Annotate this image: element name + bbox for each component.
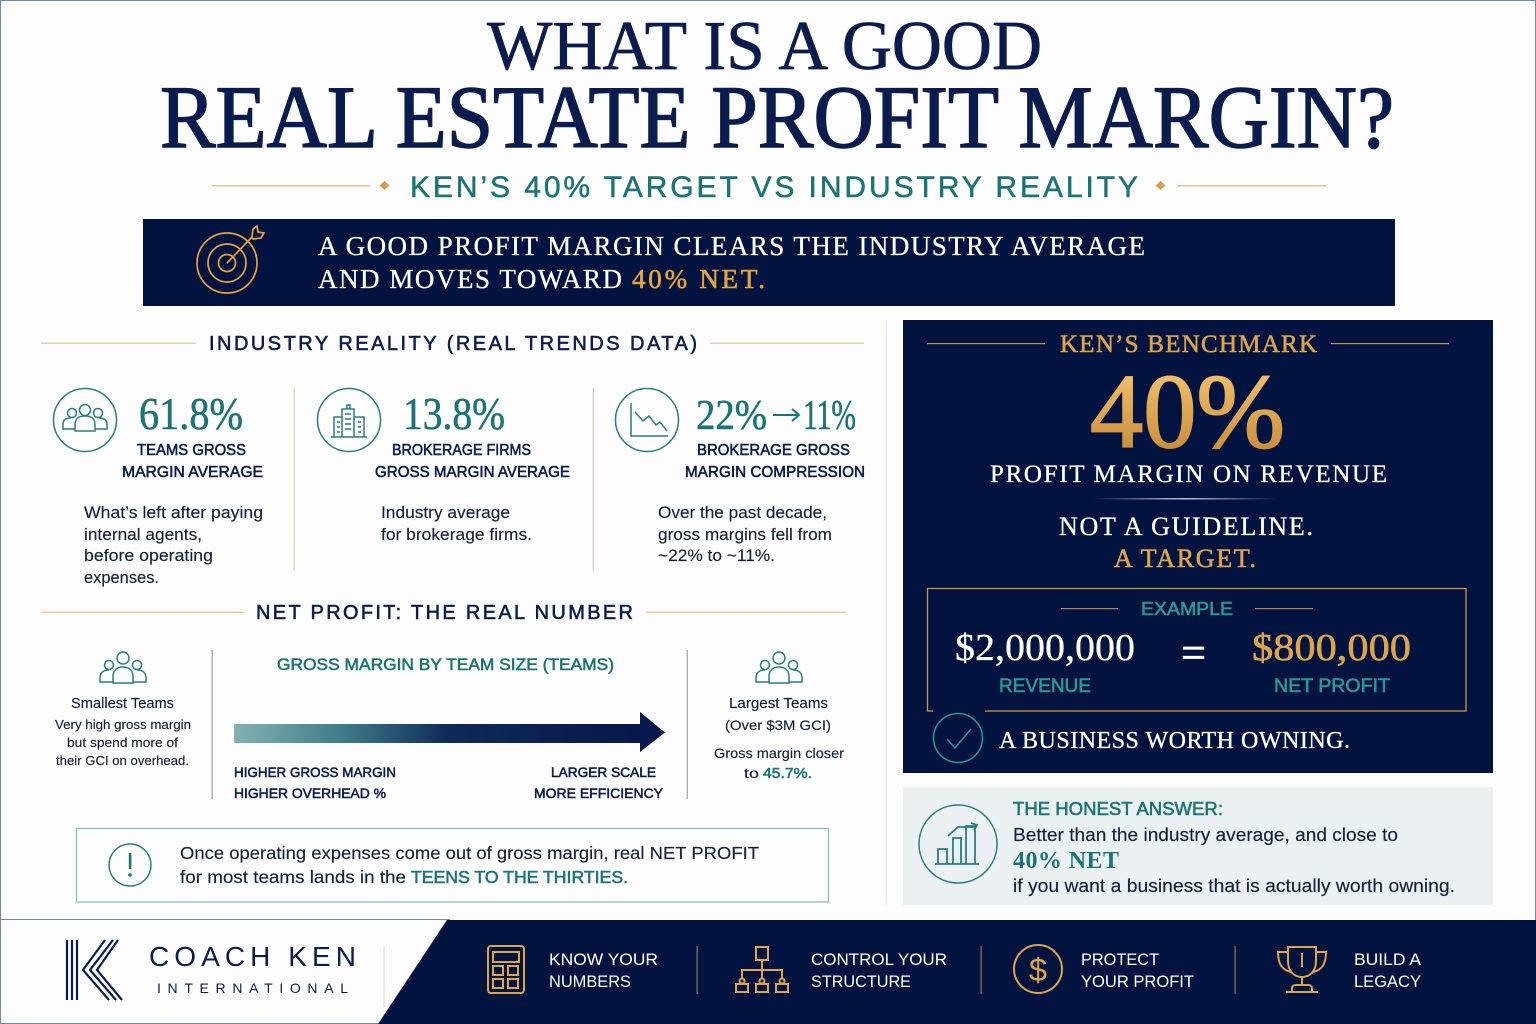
icon: check mark <box>934 714 982 762</box>
item: know your numbers: KNOW YOUR <box>549 950 658 969</box>
largest teams column: Gross margin closer <box>714 745 844 761</box>
panel: the honest answer: Better than the industry average, and close to <box>1013 825 1398 845</box>
panel: Ken's benchmark <box>903 320 1493 773</box>
arrow: scale gradient <box>234 712 665 752</box>
chart: gross margin by team size: LARGER SCALE <box>551 764 656 780</box>
stat: brokerage gross margin compression: 11% <box>803 393 856 439</box>
icon: smallest team <box>100 652 146 683</box>
chart: gross margin by team size: HIGHER GROSS MARGIN <box>234 764 396 780</box>
stat: teams gross margin: TEAMS GROSS <box>137 442 246 459</box>
stat: teams gross margin: 61.8% <box>139 389 243 439</box>
icon: growth bars <box>919 805 997 883</box>
icon: largest team <box>756 652 802 683</box>
smallest teams column: but spend more of <box>67 735 178 750</box>
item: protect your profit: PROTECT <box>1081 950 1159 969</box>
stat: brokerage gross margin compression: gross margins fell from <box>658 525 832 544</box>
icon: office buildings <box>318 388 380 452</box>
largest teams column: Largest Teams <box>729 696 828 712</box>
icon: dollar coin: $ <box>1029 952 1047 988</box>
stat: teams gross margin: What’s left after paying <box>84 503 263 522</box>
largest teams column: to <box>744 765 759 781</box>
example box: $2,000,000 <box>955 627 1135 669</box>
icon: trophy <box>1278 947 1326 992</box>
stat: teams gross margin: internal agents, <box>84 525 202 544</box>
chart: gross margin by team size: MORE EFFICIENCY <box>534 785 664 801</box>
panel: Ken's benchmark: A BUSINESS WORTH OWNING. <box>999 728 1350 754</box>
stat: brokerage gross margin compression: MARGIN COMPRESSION <box>685 464 865 481</box>
heading: net profit: NET PROFIT: THE REAL NUMBER <box>256 602 633 624</box>
chart: gross margin by team size: HIGHER OVERHEAD % <box>234 785 386 801</box>
stat: brokerage firms gross margin: for brokerage firms. <box>381 525 532 544</box>
stat: brokerage gross margin compression: BROKERAGE GROSS <box>697 442 850 459</box>
item: know your numbers <box>488 946 658 993</box>
logo: Coach Ken International <box>67 940 385 1007</box>
heading: industry reality: INDUSTRY REALITY (REAL TRENDS DATA) <box>209 333 697 355</box>
smallest teams column <box>55 652 191 768</box>
example box: REVENUE <box>999 676 1091 697</box>
panel: the honest answer <box>903 787 1493 905</box>
callout: net profit range: Once operating expenses come out of gross margin, real NET PROFIT <box>180 843 759 863</box>
stat: brokerage firms gross margin <box>318 388 570 544</box>
stat: brokerage firms gross margin: 13.8% <box>403 389 505 439</box>
panel: the honest answer: 40% NET <box>1013 848 1119 874</box>
icon: declining chart <box>616 388 678 452</box>
subtitle: KEN’S 40% TARGET VS INDUSTRY REALITY <box>410 171 1138 204</box>
chart: gross margin by team size <box>234 656 665 801</box>
example box: EXAMPLE <box>1141 599 1233 619</box>
icon: target with arrow <box>197 226 264 293</box>
title: REAL ESTATE PROFIT MARGIN? <box>160 69 1394 167</box>
icon: org chart <box>736 947 788 992</box>
panel: Ken's benchmark: PROFIT MARGIN ON REVENUE <box>990 461 1387 488</box>
banner: key statement: AND MOVES TOWARD <box>318 264 622 294</box>
largest teams column <box>714 652 844 782</box>
callout: net profit range <box>76 828 828 902</box>
subtitle <box>212 171 1327 204</box>
logo: Coach Ken International: COACH KEN <box>149 941 356 972</box>
banner: key statement: A GOOD PROFIT MARGIN CLEARS THE INDUSTRY AVERAGE <box>318 231 1145 261</box>
stat: brokerage gross margin compression: ~22% to ~11%. <box>658 546 775 565</box>
logo: Coach Ken International: INTERNATIONAL <box>157 980 348 996</box>
item: build a legacy <box>1278 947 1422 992</box>
largest teams column: 45.7%. <box>763 766 812 782</box>
item: build a legacy: BUILD A <box>1354 950 1422 969</box>
footer <box>0 919 1536 1024</box>
item: control your structure: CONTROL YOUR <box>811 950 947 969</box>
item: build a legacy: LEGACY <box>1354 972 1421 991</box>
example box <box>928 588 1466 711</box>
panel: Ken's benchmark: NOT A GUIDELINE. <box>1059 512 1313 541</box>
smallest teams column: Very high gross margin <box>55 717 191 732</box>
stat: teams gross margin: MARGIN AVERAGE <box>122 464 263 481</box>
chart: gross margin by team size: GROSS MARGIN BY TEAM SIZE (TEAMS) <box>277 656 614 674</box>
big number: 40%: 40% <box>1090 353 1285 470</box>
item: protect your profit <box>1014 945 1194 993</box>
icon: exclamation <box>109 844 151 886</box>
stat: brokerage firms gross margin: BROKERAGE FIRMS <box>392 442 531 459</box>
icon: team of people <box>54 388 116 452</box>
panel: the honest answer: THE HONEST ANSWER: <box>1013 799 1223 819</box>
stat: teams gross margin: expenses. <box>84 568 159 587</box>
example box: $800,000 <box>1252 627 1411 669</box>
example box: = <box>1181 627 1206 678</box>
stat: teams gross margin <box>54 388 263 587</box>
item: know your numbers: NUMBERS <box>549 972 631 991</box>
panel: Ken's benchmark: A TARGET. <box>1114 544 1256 573</box>
item: protect your profit: YOUR PROFIT <box>1081 972 1194 991</box>
smallest teams column: their GCI on overhead. <box>56 753 189 768</box>
banner: key statement: 40% NET. <box>632 264 765 294</box>
title <box>160 8 1394 167</box>
callout: net profit range: for most teams lands in the <box>180 867 406 887</box>
stat: brokerage firms gross margin: Industry average <box>381 503 510 522</box>
stat: teams gross margin: before operating <box>84 546 213 565</box>
smallest teams column: Smallest Teams <box>71 696 174 712</box>
icon: K monogram <box>67 940 122 1000</box>
stat: brokerage gross margin compression <box>616 388 865 565</box>
largest teams column: (Over $3M GCI) <box>725 717 831 733</box>
stat: brokerage gross margin compression: Over the past decade, <box>658 503 827 522</box>
item: control your structure <box>736 947 947 992</box>
icon: dollar coin <box>1014 945 1062 993</box>
stat: brokerage firms gross margin: GROSS MARGIN AVERAGE <box>375 464 570 481</box>
stat: brokerage gross margin compression: 22% <box>696 393 767 439</box>
item: control your structure: STRUCTURE <box>811 972 911 991</box>
banner: key statement <box>143 219 1395 306</box>
heading: Ken's benchmark: KEN’S BENCHMARK <box>1060 331 1317 358</box>
panel: the honest answer: if you want a business that is actually worth owning. <box>1013 876 1455 896</box>
icon: calculator <box>488 946 524 993</box>
title: WHAT IS A GOOD <box>487 8 1042 85</box>
example box: NET PROFIT <box>1274 676 1390 697</box>
callout: net profit range: TEENS TO THE THIRTIES. <box>411 867 628 887</box>
